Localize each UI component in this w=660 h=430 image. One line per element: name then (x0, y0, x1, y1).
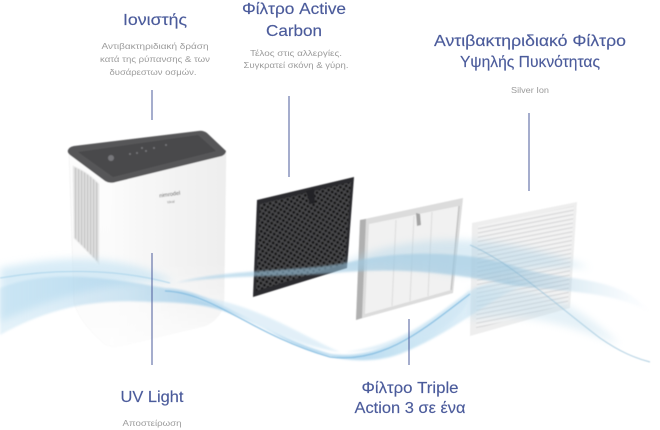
UV light heading: UV Light (120, 389, 184, 406)
ionizer description: δυσάρεστων οσμών. (110, 67, 196, 77)
wave: main ribbon crest (165, 291, 470, 358)
airflow waves (0, 240, 650, 362)
high density description: Silver Ion (511, 85, 549, 95)
active carbon heading: Carbon (266, 23, 322, 40)
triple action heading (354, 380, 466, 417)
triple action heading: Action 3 σε ένα (354, 400, 466, 417)
triple filter tab (416, 213, 421, 226)
purifier inner glass (78, 135, 216, 177)
wave: left wisp (0, 271, 170, 283)
purifier front shading (110, 152, 226, 346)
wave: main ribbon (0, 276, 535, 360)
active carbon description (244, 48, 348, 70)
product: active carbon filter (253, 177, 354, 297)
purifier body (69, 152, 226, 346)
ionizer description (100, 41, 210, 77)
ionizer leader line (151, 90, 153, 120)
high density filter frame (470, 202, 577, 336)
carbon honeycomb mesh (256, 182, 351, 291)
wave: left fan (0, 259, 175, 322)
callout: triple action filter (354, 319, 466, 417)
triple filter front edge (356, 219, 366, 320)
product: air purifier (68, 131, 226, 348)
wave: descending line (470, 245, 650, 362)
triple action heading: Φίλτρο Triple (362, 380, 459, 397)
purifier lower fade (74, 262, 225, 348)
carbon filter tab (306, 189, 315, 204)
wave: upper band soft glow (345, 240, 590, 275)
carbon frame (253, 177, 354, 297)
high density heading (434, 33, 626, 71)
triple filter pleats (392, 212, 432, 306)
UV light leader line (151, 253, 153, 365)
ionizer description: κατά της ρύπανσης & των (100, 54, 210, 64)
wave: pale fill under filters (190, 290, 470, 352)
high density heading: Αντιβακτηριδιακό Φίλτρο (434, 33, 626, 50)
active carbon heading (242, 1, 346, 40)
callout: ionizer (100, 12, 210, 120)
callout: high density antibacterial filter (434, 33, 626, 191)
triple filter inner edge (451, 206, 459, 290)
control panel lights (108, 144, 167, 161)
active carbon description: Τέλος στις αλλεργίες. (250, 48, 342, 58)
ionizer heading: Ιονιστής (123, 12, 187, 29)
ionizer description: Αντιβακτηριδιακή δράση (102, 41, 209, 51)
triple filter media (365, 206, 459, 314)
purifier top panel (68, 131, 226, 183)
high density heading: Υψηλής Πυκνότητας (460, 54, 600, 71)
high density filter stripes (476, 206, 574, 329)
high density leader line (528, 113, 530, 191)
brand logo: nimrodel (159, 191, 181, 199)
product: high density antibacterial filter (470, 202, 577, 336)
model label: Ideal (167, 200, 175, 204)
callout: UV light (120, 253, 184, 428)
wave: upper band (175, 254, 650, 312)
callout: active carbon filter (242, 1, 348, 177)
UV light description: Αποστείρωση (122, 418, 182, 428)
wave: faint right ribbon (470, 287, 620, 345)
triple filter frame (356, 198, 463, 320)
product: triple action filter (356, 198, 463, 320)
purifier side vent (73, 166, 99, 264)
active carbon heading: Φίλτρο Active (242, 1, 346, 18)
triple action leader line (408, 319, 410, 365)
active carbon description: Συγκρατεί σκόνη & γύρη. (244, 60, 348, 70)
active carbon leader line (288, 96, 290, 177)
